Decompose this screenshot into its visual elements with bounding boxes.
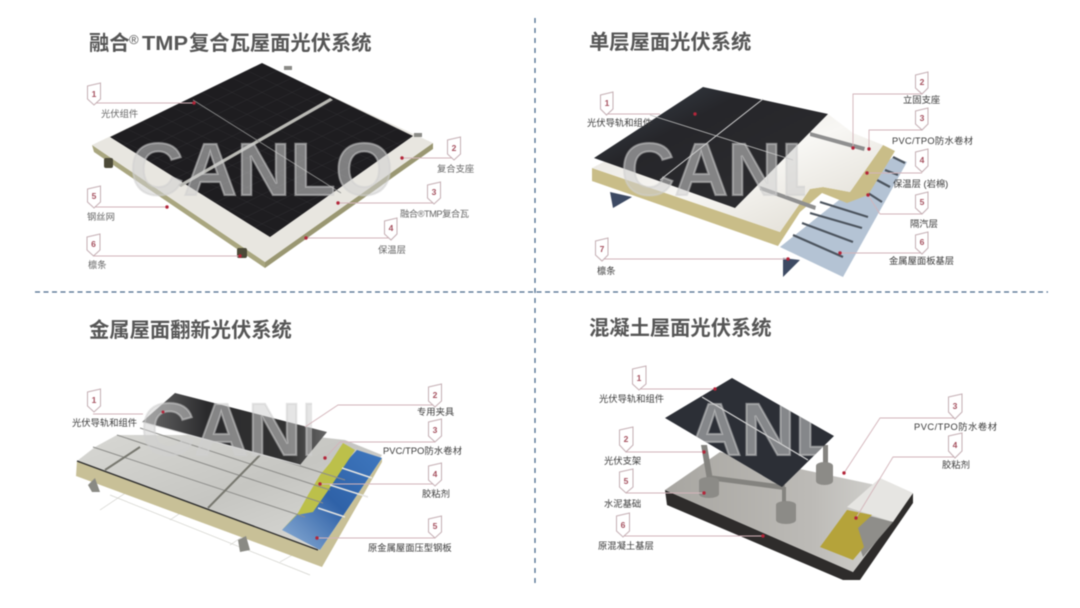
callout 1: rails and modules: 光伏导轨和组件 — [72, 417, 137, 428]
callout 1: rails and modules: 光伏导轨和组件 — [599, 393, 664, 404]
horizontal divider — [35, 291, 1048, 293]
callout 1: rails and modules: 1 — [637, 373, 642, 383]
callout 1: rails and modules: 1 — [92, 395, 97, 405]
callout 6: metal deck base: 6 — [920, 237, 925, 247]
callout 7: purlin: 7 — [600, 244, 605, 254]
diagram: single-ply roof: CANLON — [621, 128, 938, 211]
callout 2: composite bracket — [400, 137, 474, 174]
callout 2: dedicated clamp: 2 — [433, 390, 438, 400]
diagram: single-ply roof — [592, 87, 938, 277]
callout 4: insulation — [304, 218, 406, 255]
callout 5: vapour barrier — [866, 192, 938, 229]
diagram: concrete roof — [665, 378, 913, 580]
diagram: TMP roof: CANLON — [130, 128, 447, 211]
callout 6: original concrete base: 原混凝土基层 — [598, 540, 654, 551]
callout 3: PVC/TPO membrane — [842, 394, 997, 475]
panel: concrete roof PV system — [589, 316, 997, 580]
callout 6: metal deck base — [838, 232, 954, 266]
callout 6: purlin: 檩条 — [88, 259, 107, 270]
callout 5: steel mesh: 5 — [92, 191, 97, 201]
callout 2: PV support: 2 — [624, 434, 629, 444]
callout 1: rails and modules: 光伏导轨和组件 — [587, 117, 652, 128]
callout 5: original profiled steel sheet — [315, 516, 452, 553]
heading: 混凝土屋面光伏系统 — [589, 316, 772, 340]
callout 1: PV module: 光伏组件 — [101, 108, 138, 119]
callout 6: purlin: 6 — [91, 239, 96, 249]
heading: 融合 — [89, 33, 130, 55]
callout 2: PV support: 光伏支架 — [604, 455, 641, 466]
callout 6: metal deck base: 金属屋面板基层 — [889, 255, 954, 266]
callout 2: composite bracket: 复合支座 — [437, 163, 474, 174]
callout 4: adhesive: 4 — [953, 440, 958, 450]
callout 4: adhesive: 4 — [433, 469, 438, 479]
diagram: concrete roof: ANL — [688, 388, 840, 471]
panel: single-ply roof PV system — [587, 30, 973, 277]
callout 2: standing seam bracket — [851, 72, 940, 150]
callout 1: PV module — [88, 83, 196, 119]
callout 2: PV support — [604, 427, 706, 466]
callout 4: adhesive: 胶粘剂 — [422, 488, 450, 499]
callout 4: rock wool insulation: 4 — [920, 155, 925, 165]
callout 3: TMP tile — [336, 182, 469, 219]
callout 5: vapour barrier: 隔汽层 — [910, 218, 938, 229]
heading: ® — [129, 32, 139, 47]
callout 7: purlin — [596, 238, 790, 276]
callout 5: steel mesh: 钢丝网 — [87, 211, 115, 222]
panel: TMP composite tile roof PV system — [87, 31, 474, 270]
callout 5: original profiled steel sheet: 5 — [433, 521, 438, 531]
callout 4: rock wool insulation: 保温层 (岩棉) — [893, 178, 948, 189]
callout 7: purlin: 檩条 — [597, 265, 616, 276]
callout 4: rock wool insulation — [865, 149, 948, 189]
callout 4: adhesive — [854, 433, 970, 520]
callout 6: purlin — [87, 234, 242, 270]
heading: 复合瓦屋面光伏系统 — [189, 31, 372, 55]
callout 1: rails and modules — [72, 389, 164, 428]
callout 1: rails and modules — [587, 92, 697, 128]
callout 2: standing seam bracket: 立固支座 — [903, 94, 940, 105]
callout 1: rails and modules — [599, 366, 717, 404]
callout 5: vapour barrier: 5 — [920, 197, 925, 207]
heading: 金属屋面翻新光伏系统 — [89, 318, 292, 342]
panel: metal roof renovation PV system — [72, 318, 462, 575]
callout 5: steel mesh — [87, 186, 169, 222]
callout 5: cement foundation — [604, 469, 706, 509]
heading: 单层屋面光伏系统 — [589, 30, 751, 54]
callout 1: PV module: 1 — [92, 89, 97, 99]
callout 4: adhesive — [318, 463, 450, 499]
callout 5: cement foundation: 5 — [624, 476, 629, 486]
callout 4: insulation: 4 — [389, 223, 394, 233]
diagram: metal roof — [76, 392, 382, 576]
callout 3: PVC/TPO membrane: PVC/TPO防水卷材 — [383, 445, 462, 456]
callout 3: PVC/TPO membrane: PVC/TPO防水卷材 — [892, 135, 973, 146]
callout 2: composite bracket: 2 — [452, 143, 457, 153]
vertical divider — [534, 18, 536, 586]
callout 4: adhesive: 胶粘剂 — [942, 459, 970, 470]
callout 3: PVC/TPO membrane: 3 — [953, 401, 958, 411]
callout 5: original profiled steel sheet: 原金属屋面压型钢板 — [368, 542, 452, 553]
callout 6: original concrete base — [598, 513, 765, 551]
callout 5: cement foundation: 水泥基础 — [604, 498, 641, 509]
diagram: metal roof: CANLON — [141, 388, 458, 471]
callout 6: original concrete base: 6 — [621, 520, 626, 530]
heading: TMP — [142, 33, 188, 55]
callout 3: PVC/TPO membrane: 3 — [433, 425, 438, 435]
callout 1: rails and modules: 1 — [605, 98, 610, 108]
callout 3: PVC/TPO membrane: PVC/TPO防水卷材 — [914, 421, 997, 432]
callout 2: dedicated clamp: 专用夹具 — [417, 406, 454, 417]
callout 3: TMP tile: 融合®TMP复合瓦 — [400, 208, 469, 219]
diagram: TMP roof — [92, 63, 447, 268]
callout 4: insulation: 保温层 — [378, 244, 406, 255]
callout 2: standing seam bracket: 2 — [920, 77, 925, 87]
callout 3: TMP tile: 3 — [432, 187, 437, 197]
callout 3: PVC/TPO membrane — [867, 108, 973, 151]
callout 3: PVC/TPO membrane: 3 — [920, 113, 925, 123]
callout 2: dedicated clamp — [305, 384, 454, 427]
callout 3: PVC/TPO membrane — [323, 419, 462, 460]
